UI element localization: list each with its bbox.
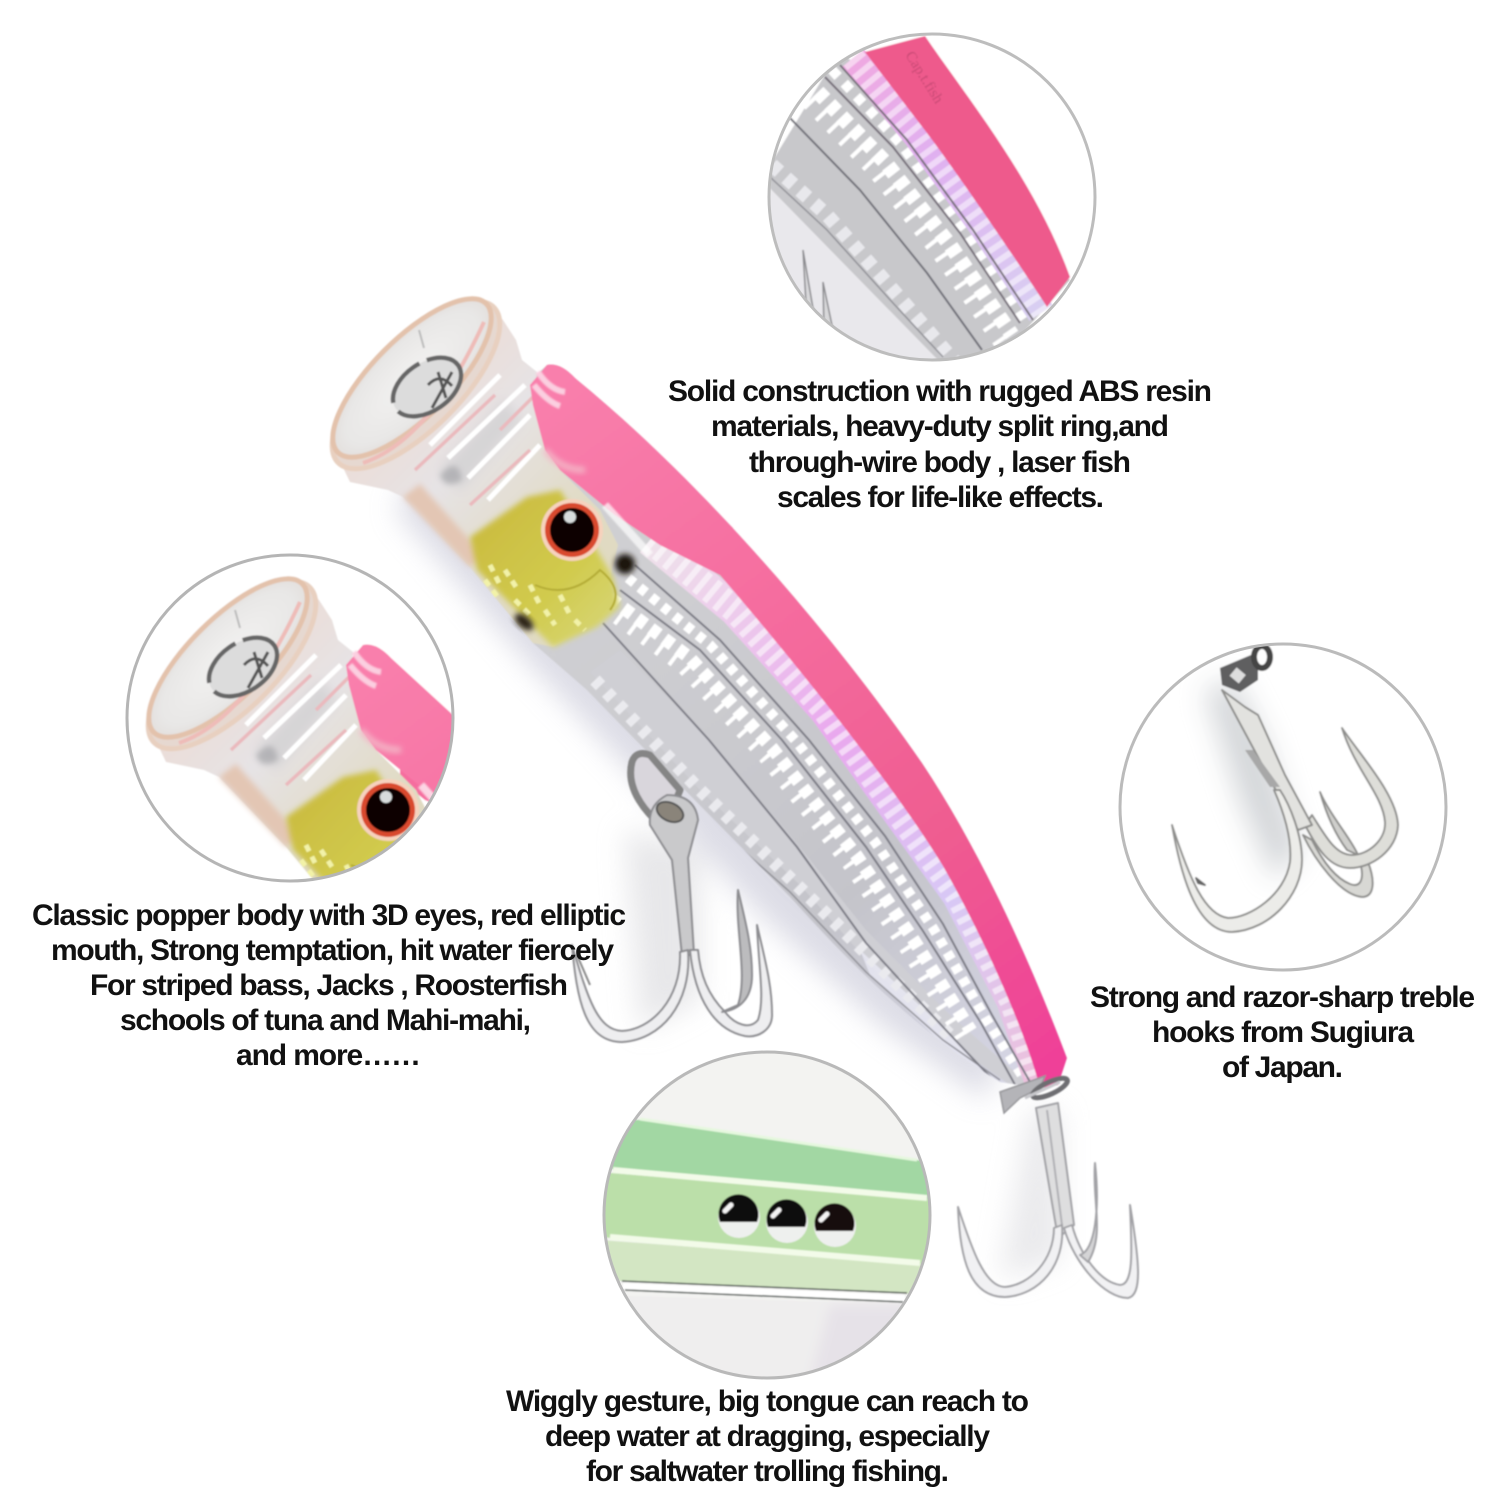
text: materials description: scales for life-like effects. <box>777 481 1104 514</box>
text: materials description: materials, heavy-duty split ring,and <box>711 410 1169 443</box>
green bands <box>600 1118 935 1200</box>
text: wiggly gesture description <box>506 1385 1029 1488</box>
text: popper body description <box>32 899 626 1072</box>
belly hook <box>572 754 772 1042</box>
panel: right circle, treble hook <box>1118 642 1448 972</box>
text: treble hooks description: of Japan. <box>1222 1051 1343 1084</box>
pink band <box>865 36 1070 307</box>
text: treble hooks description <box>1090 981 1475 1084</box>
hook tips in circle <box>803 250 833 330</box>
pink back <box>547 365 1067 1090</box>
panel: bottom circle, green tongue with beads <box>600 1050 935 1380</box>
lure head <box>307 276 733 647</box>
text: wiggly gesture description: Wiggly gesture, big tongue can reach to <box>506 1385 1029 1418</box>
beads <box>718 1194 856 1247</box>
circle border <box>769 34 1095 360</box>
text: materials description: Solid construction with rugged ABS resin <box>668 375 1212 408</box>
treble hook <box>1172 690 1398 932</box>
tail ring <box>1000 1075 1070 1113</box>
iridescent strip <box>650 540 1040 1080</box>
dark stripes <box>603 565 1038 1100</box>
logo mark in circle: Cap.t.fish <box>902 49 946 107</box>
tail hook <box>958 1103 1138 1298</box>
main lure <box>307 276 1138 1298</box>
text: wiggly gesture description: for saltwater trolling fishing. <box>586 1455 949 1488</box>
text: treble hooks description: Strong and razor-sharp treble <box>1090 981 1475 1014</box>
text: popper body description: and more…… <box>236 1039 421 1072</box>
panel: top circle, laser fish scales <box>760 30 1105 370</box>
hook shadow <box>1205 680 1300 880</box>
scale band <box>772 165 955 362</box>
lure body <box>534 367 1068 1088</box>
lower scale band <box>590 676 1024 1085</box>
white teeth <box>813 97 1007 340</box>
circle border <box>1120 644 1446 970</box>
text: treble hooks description: hooks from Sugiura <box>1152 1016 1414 1049</box>
text: materials description: through-wire body , laser fish <box>749 446 1131 479</box>
iridescent strip <box>853 58 1041 313</box>
panel: left circle, popper head and 3D eye <box>126 554 454 882</box>
text: wiggly gesture description: deep water at dragging, especially <box>545 1420 990 1453</box>
text: popper body description: schools of tuna and Mahi-mahi, <box>120 1004 531 1037</box>
text: popper body description: Classic popper body with 3D eyes, red elliptic <box>32 899 626 932</box>
white scale teeth <box>606 604 967 1037</box>
circle border <box>604 1052 930 1378</box>
text: popper body description: mouth, Strong temptation, hit water fiercely <box>51 934 614 967</box>
text: popper body description: For striped bass, Jacks , Roosterfish <box>90 969 568 1002</box>
split ring <box>1220 646 1270 692</box>
soft shadow under lure <box>395 470 1060 1280</box>
text: materials description <box>668 375 1212 514</box>
circle border <box>127 555 453 881</box>
